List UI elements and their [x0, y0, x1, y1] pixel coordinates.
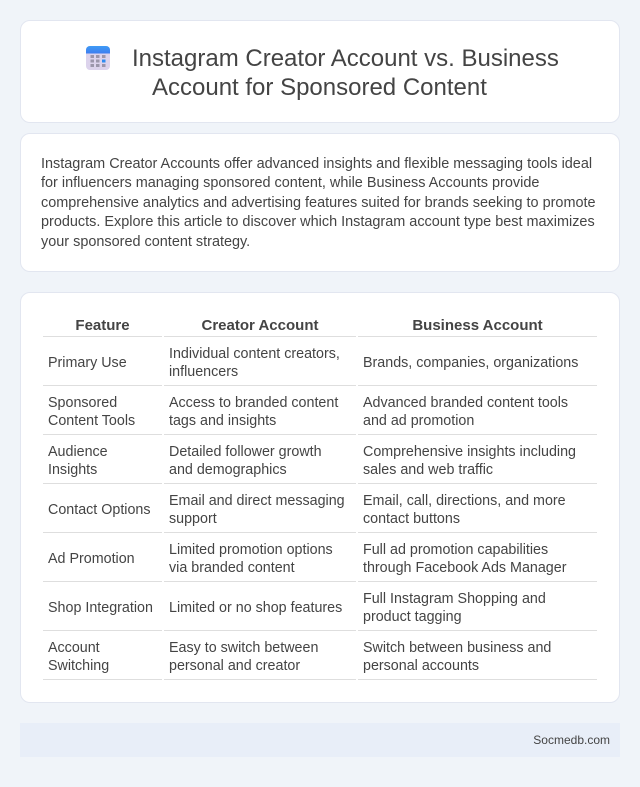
row: sponsored content tools: Sponsored: [48, 395, 117, 411]
footer text: Socmedb.com: [533, 733, 610, 747]
panel: intro text card: [20, 133, 620, 272]
intro paragraph: [41, 156, 596, 250]
text: support: [169, 511, 217, 527]
text: influencers: [169, 364, 238, 380]
icon: calendar: [86, 46, 110, 70]
row: sponsored content tools: [48, 395, 135, 429]
panel: comparison table card: [20, 292, 620, 703]
intro paragraph: your sponsored content strategy.: [41, 234, 250, 250]
row: account switching: Account: [48, 640, 100, 656]
panel: title card: [20, 20, 620, 123]
text: product tagging: [363, 609, 462, 625]
text: Limited or no shop features: [169, 600, 342, 616]
intro paragraph: comprehensive analytics and advertising features suited for brands seeking to promote: [41, 194, 596, 210]
row: shop integration: Shop Integration: [48, 600, 153, 616]
footer bar: [20, 723, 620, 757]
text: personal and creator: [169, 658, 300, 674]
text: Advanced branded content tools: [363, 395, 568, 411]
row: account switching: [48, 640, 109, 674]
row: primary use: Primary Use: [48, 355, 127, 371]
text: tags and insights: [169, 413, 276, 429]
text: and demographics: [169, 462, 287, 478]
intro paragraph: Instagram Creator Accounts offer advanced insights and flexible messaging tools ideal: [41, 156, 592, 172]
text: Full Instagram Shopping and: [363, 591, 546, 607]
row: audience insights: [48, 444, 108, 478]
row: audience insights: Insights: [48, 462, 97, 478]
intro paragraph: for influencers managing sponsored content, while Business Accounts provide: [41, 175, 539, 191]
text: sales and web traffic: [363, 462, 493, 478]
text: through Facebook Ads Manager: [363, 560, 566, 576]
row: sponsored content tools: Content Tools: [48, 413, 135, 429]
title: [132, 45, 559, 101]
text: Access to branded content: [169, 395, 338, 411]
row: ad promotion: Ad Promotion: [48, 551, 135, 567]
text: Comprehensive insights including: [363, 444, 576, 460]
text: via branded content: [169, 560, 295, 576]
table header: feature: Feature: [75, 317, 130, 334]
row: audience insights: Audience: [48, 444, 108, 460]
text: Detailed follower growth: [169, 444, 322, 460]
text: and ad promotion: [363, 413, 474, 429]
text: Email, call, directions, and more: [363, 493, 566, 509]
text: Brands, companies, organizations: [363, 355, 578, 371]
text: Easy to switch between: [169, 640, 318, 656]
text: Individual content creators,: [169, 346, 340, 362]
text: Email and direct messaging: [169, 493, 345, 509]
text: Limited promotion options: [169, 542, 333, 558]
text: contact buttons: [363, 511, 460, 527]
table header: creator account: Creator Account: [202, 317, 318, 334]
text: Full ad promotion capabilities: [363, 542, 548, 558]
intro paragraph: products. Explore this article to discover which Instagram account type best maximizes: [41, 214, 595, 230]
text: Switch between business and: [363, 640, 551, 656]
table header: business account: Business Account: [412, 317, 543, 334]
row: contact options: Contact Options: [48, 502, 151, 518]
text: personal accounts: [363, 658, 479, 674]
title: Instagram Creator Account vs. Business: [132, 45, 559, 72]
row: account switching: Switching: [48, 658, 109, 674]
title: Account for Sponsored Content: [152, 74, 487, 101]
